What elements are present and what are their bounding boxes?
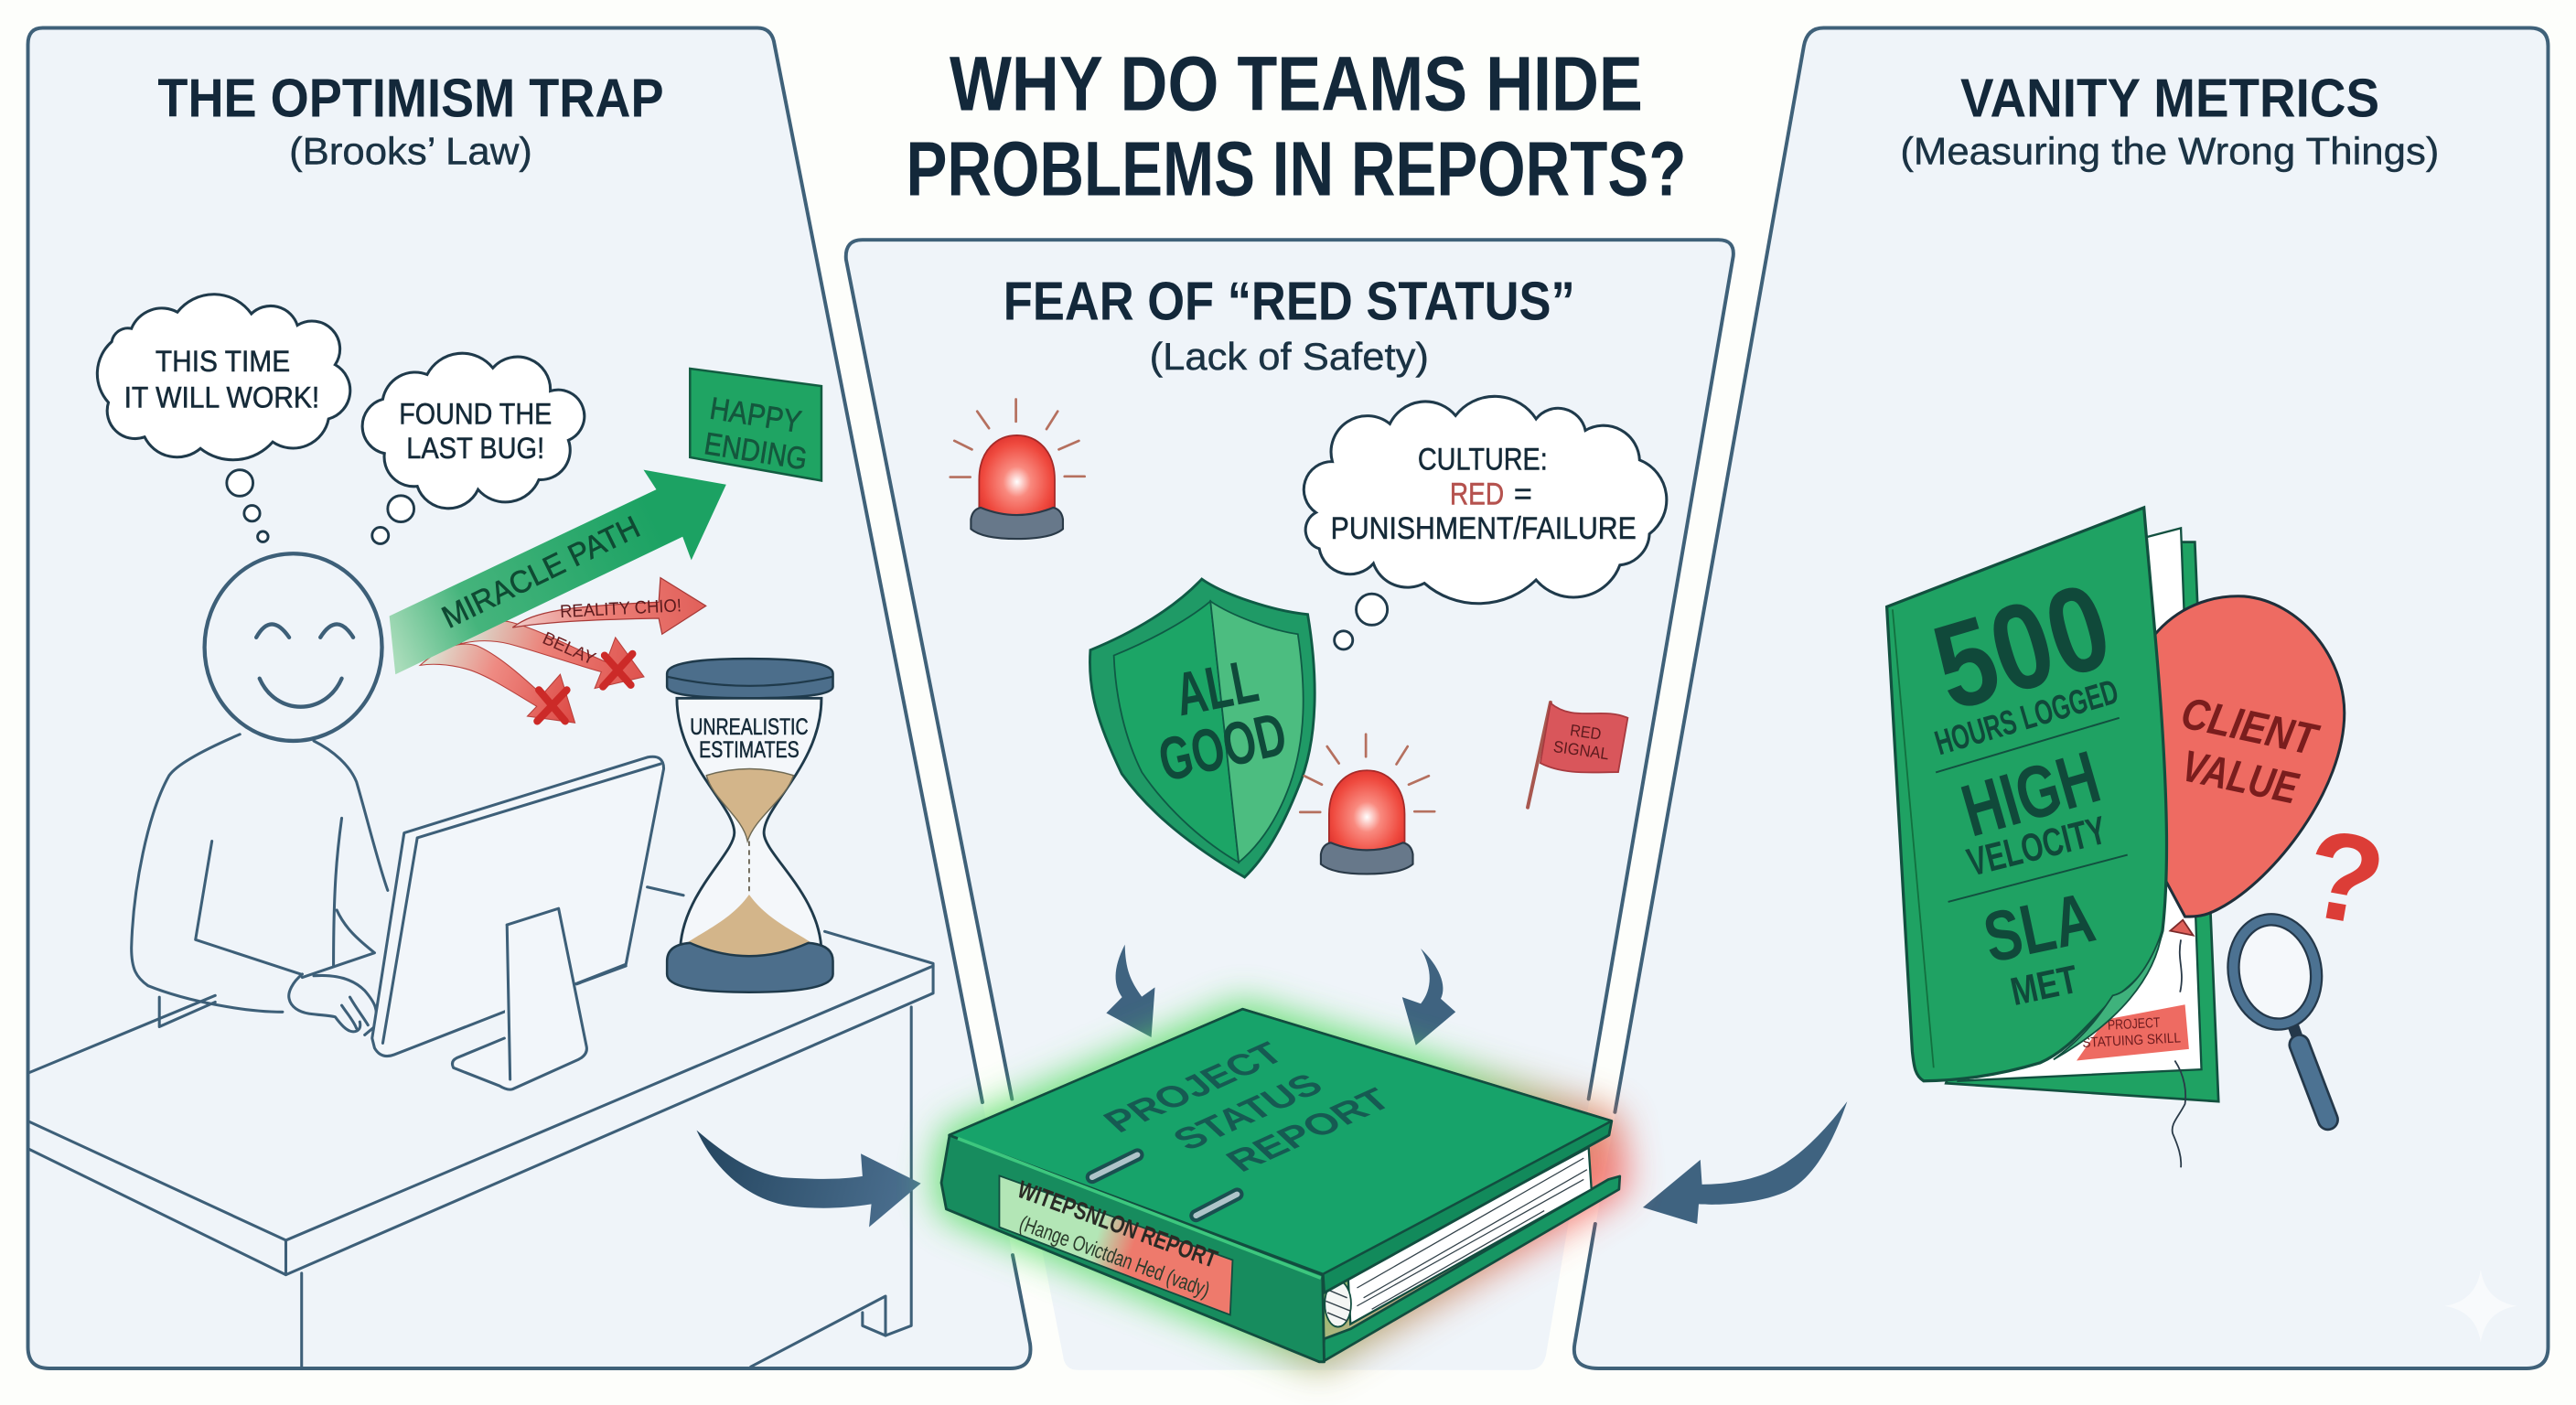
heading: the optimism trap: THE OPTIMISM TRAP xyxy=(157,68,664,129)
inner pages xyxy=(1959,528,2202,1081)
icon: red signal flag: SIGNAL xyxy=(1552,737,1610,763)
thought bubble: culture red equals punishment: = xyxy=(1514,477,1532,511)
red label: project status: STATUING SKILL xyxy=(2082,1030,2181,1051)
red arrow: reality check xyxy=(512,578,706,634)
front green cover with vanity stats xyxy=(1887,508,2167,1081)
computer monitor xyxy=(372,756,683,1089)
binder rings xyxy=(1092,1155,1237,1216)
subheading: lack of safety: (Lack of Safety) xyxy=(1150,336,1429,378)
front green cover with vanity stats: MET xyxy=(2007,958,2082,1014)
red arrow: reality check: REALITY CHIO! xyxy=(560,595,682,622)
page block xyxy=(1325,1148,1592,1327)
sign: happy ending: HAPPY xyxy=(707,391,804,440)
spine label half green half red xyxy=(999,1175,1232,1314)
binder cover title: REPORT xyxy=(1218,1081,1400,1178)
red arrow: delay with cross xyxy=(420,644,575,723)
arrow: right panel into report xyxy=(1643,1101,1847,1224)
red label: project status xyxy=(2077,1004,2189,1060)
faint sparkle watermark xyxy=(2444,1270,2517,1342)
balloon: client value: VALUE xyxy=(2177,741,2303,814)
thought bubble: found the last bug: LAST BUG! xyxy=(406,432,544,465)
binder cover title: PROJECT xyxy=(1095,1035,1293,1139)
icon: shield all good xyxy=(1089,579,1315,877)
arrow: down right to report xyxy=(1402,949,1455,1046)
hourglass: unrealistic estimates: ESTIMATES xyxy=(699,737,800,763)
back cover xyxy=(1323,1176,1620,1362)
thought bubble: this time it will work: THIS TIME xyxy=(156,345,290,378)
red arrow: belay with cross: BELAY xyxy=(540,628,598,670)
thought bubble: culture red equals punishment xyxy=(1304,396,1667,649)
red label: project status: PROJECT xyxy=(2108,1015,2161,1034)
arrow: down left to report xyxy=(1106,945,1155,1037)
icon: shield all good: GOOD xyxy=(1153,700,1293,795)
person body xyxy=(132,735,388,1035)
icon: shield all good: ALL xyxy=(1170,648,1263,729)
heading: vanity metrics: VANITY METRICS xyxy=(1960,68,2379,129)
thought bubble: found the last bug xyxy=(362,353,585,543)
central binder: project status report xyxy=(941,1009,1620,1362)
main title: PROBLEMS IN REPORTS? xyxy=(906,126,1687,212)
front green cover with vanity stats: HIGH xyxy=(1953,735,2109,853)
thought bubble: culture red equals punishment: PUNISHMENT/FAILURE xyxy=(1331,511,1637,546)
front green cover with vanity stats: VELOCITY xyxy=(1963,809,2111,885)
book of vanity metrics xyxy=(1887,508,2345,1167)
icon: magnifying glass xyxy=(2226,913,2328,1120)
front green cover with vanity stats: 500 xyxy=(1919,558,2125,737)
sign: happy ending: ENDING xyxy=(702,426,810,477)
arrow: left panel into report xyxy=(696,1131,921,1228)
heading: fear of red status: FEAR OF “RED STATUS” xyxy=(1004,270,1575,331)
red arrow: belay with cross xyxy=(460,621,644,688)
balloon: client value xyxy=(2153,596,2345,1167)
binder cover title xyxy=(1095,1035,1400,1178)
panel: fear of red status xyxy=(846,240,1733,1370)
thought bubble: culture red equals punishment: CULTURE: xyxy=(1418,443,1548,477)
green arrow: miracle path: MIRACLE PATH xyxy=(436,509,645,636)
glow: green and red halo xyxy=(941,1009,1620,1362)
back cover xyxy=(1946,542,2218,1101)
green arrow: miracle path xyxy=(390,470,726,674)
hourglass: unrealistic estimates: UNREALISTIC xyxy=(690,714,809,740)
spine xyxy=(941,1135,1325,1362)
spine label half green half red: WITEPSNLON REPORT xyxy=(1014,1175,1221,1273)
panel: vanity metrics xyxy=(1574,28,2548,1368)
icon: red siren lower xyxy=(1300,735,1434,874)
front green cover with vanity stats: HOURS LOGGED xyxy=(1930,671,2122,762)
person head with smile xyxy=(205,553,382,741)
top cover xyxy=(950,1009,1612,1292)
icon: red siren top xyxy=(950,399,1085,539)
icon: red signal flag: RED xyxy=(1569,721,1603,744)
thought bubble: this time it will work xyxy=(97,295,350,542)
main title xyxy=(906,40,1687,212)
thought bubble: this time it will work: IT WILL WORK! xyxy=(124,381,319,413)
front green cover with vanity stats: SLA xyxy=(1977,878,2101,978)
sign: happy ending xyxy=(690,369,821,480)
icon: question mark: ? xyxy=(2295,801,2394,953)
desk xyxy=(29,931,933,1368)
subheading: measuring the wrong things: (Measuring the Wrong Things) xyxy=(1900,131,2439,173)
thought bubble: found the last bug: FOUND THE xyxy=(399,397,552,430)
panel: the optimism trap xyxy=(28,28,1030,1368)
thought bubble: culture red equals punishment: RED xyxy=(1450,477,1504,511)
hourglass: unrealistic estimates xyxy=(667,659,833,992)
person xyxy=(132,553,388,1035)
balloon: client value: CLIENT xyxy=(2177,688,2324,766)
subheading: brooks' law: (Brooks’ Law) xyxy=(289,131,532,173)
binder cover title: STATUS xyxy=(1164,1067,1331,1157)
spine label half green half red: (Hange Ovictdan Hed (vady) xyxy=(1016,1211,1213,1302)
main title: WHY DO TEAMS HIDE xyxy=(950,40,1643,126)
icon: red signal flag xyxy=(1528,702,1627,808)
